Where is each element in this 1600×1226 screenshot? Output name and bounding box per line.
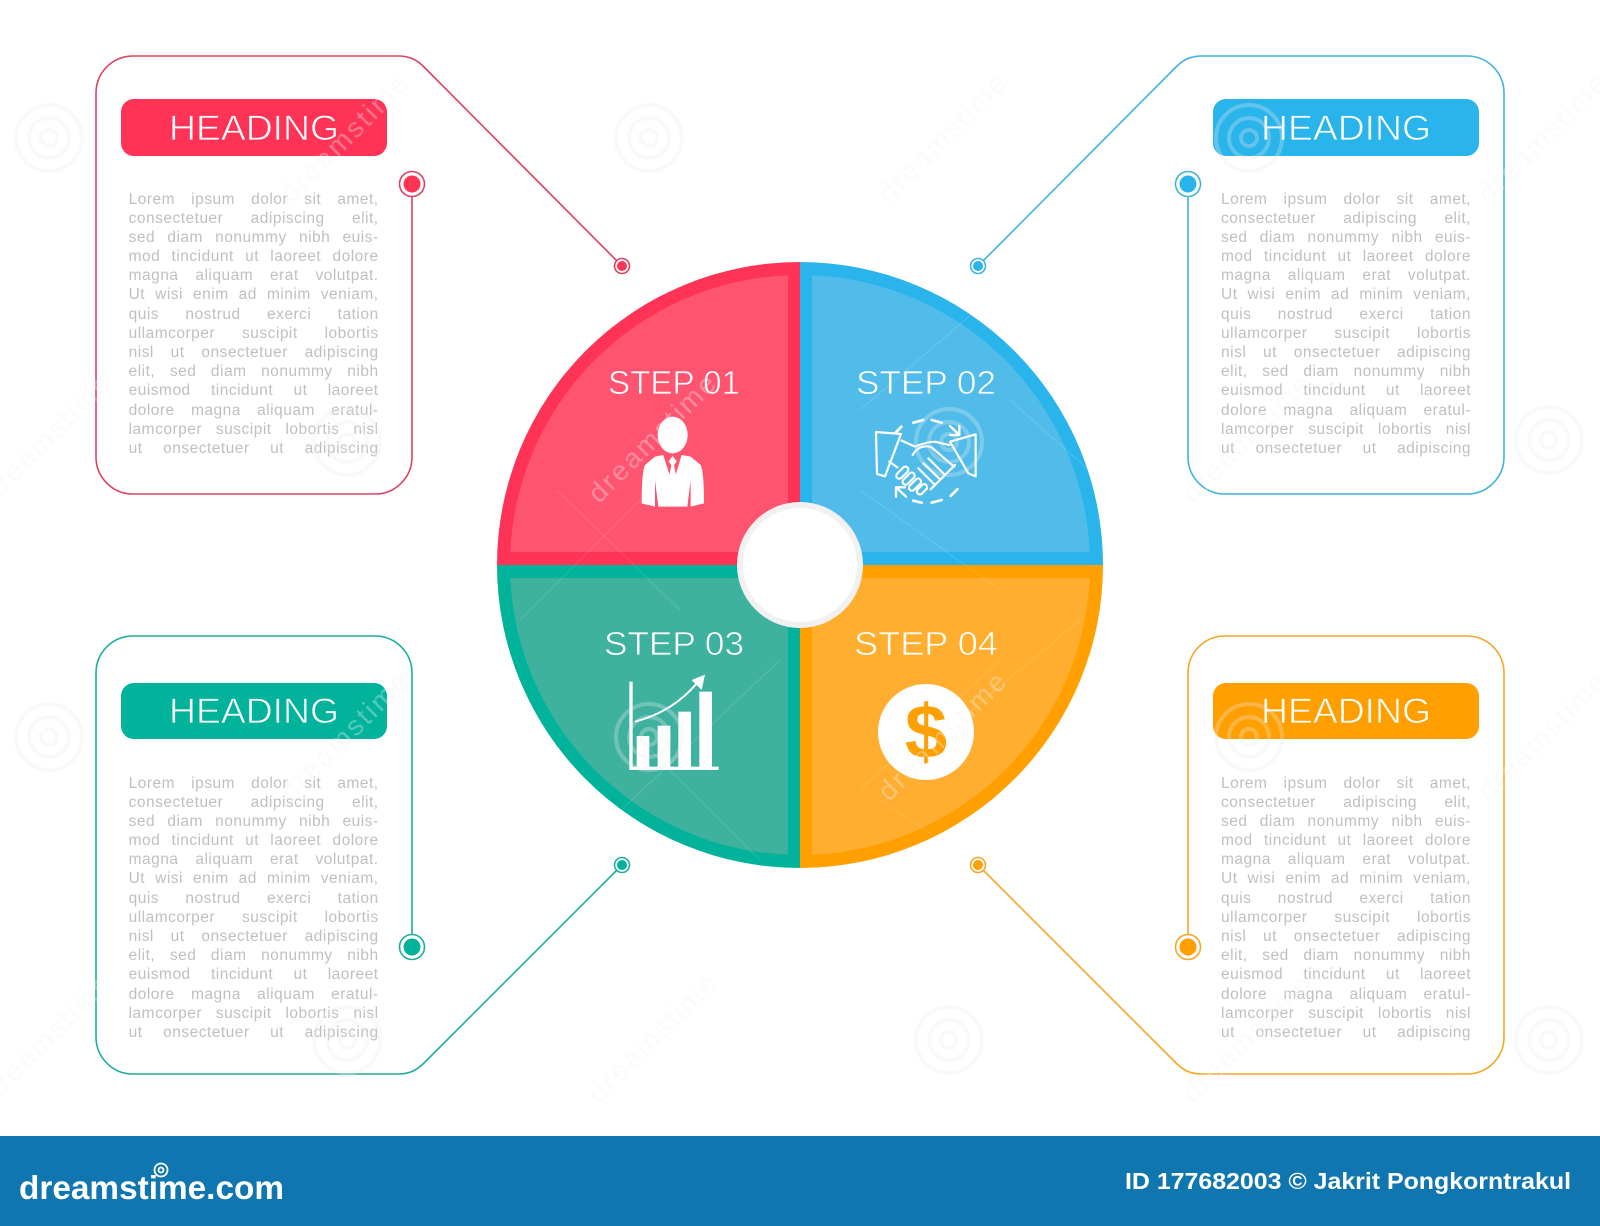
green outline and connector	[96, 636, 630, 1074]
panel: blue heading box	[970, 55, 1505, 495]
green body text: ut onsectetuer ut adipiscing	[129, 1024, 379, 1041]
panel: red heading box	[95, 55, 630, 495]
red body text: dolore magna aliquam eratul-	[129, 402, 379, 419]
red body text: ut onsectetuer ut adipiscing	[129, 440, 379, 457]
green body text: elit, sed diam nonummy nibh	[129, 947, 379, 964]
green heading bar	[121, 683, 387, 739]
orange body text: quis nostrud exerci tation	[1221, 890, 1471, 907]
orange body text: ullamcorper suscipit lobortis	[1221, 909, 1471, 926]
green body text	[129, 774, 379, 1041]
red body text: elit, sed diam nonummy nibh	[129, 363, 379, 380]
blue body text: nisl ut onsectetuer adipiscing	[1221, 344, 1471, 361]
blue body text: consectetuer adipiscing elit,	[1221, 210, 1471, 227]
segment: step 03 green	[497, 565, 800, 868]
icon: bar chart with arrow	[629, 675, 719, 770]
blue body text: Lorem ipsum dolor sit amet,	[1221, 190, 1471, 208]
green body text: quis nostrud exerci tation	[129, 890, 379, 907]
center hub	[740, 505, 860, 625]
icon: handshake	[876, 420, 976, 503]
orange heading bar: HEADING	[1261, 692, 1431, 731]
red body text: Ut wisi enim ad minim veniam,	[129, 286, 379, 303]
orange body text: ut onsectetuer ut adipiscing	[1221, 1024, 1471, 1041]
orange body text	[1221, 774, 1471, 1041]
orange body text: elit, sed diam nonummy nibh	[1221, 947, 1471, 964]
footer credit: ID 177682003 © Jakrit Pongkorntrakul	[1125, 1168, 1571, 1194]
green heading bar: HEADING	[169, 692, 339, 731]
footer logo: dreamstime.com	[19, 1169, 284, 1206]
label: step 03: STEP 03	[604, 625, 744, 662]
segment: step 04 orange	[800, 565, 1103, 868]
green body text: magna aliquam erat volutpat.	[129, 851, 379, 868]
icon: businessman	[642, 417, 704, 507]
red body text	[129, 190, 379, 457]
red body text: quis nostrud exerci tation	[129, 306, 379, 323]
blue outline and connector	[970, 56, 1504, 494]
orange heading bar	[1213, 683, 1479, 739]
blue body text: ut onsectetuer ut adipiscing	[1221, 440, 1471, 457]
blue body text: magna aliquam erat volutpat.	[1221, 267, 1471, 284]
green body text: euismod tincidunt ut laoreet	[129, 966, 379, 983]
label: step 04: STEP 04	[854, 625, 998, 662]
segment: step 02 blue	[800, 262, 1103, 565]
blue body text	[1221, 190, 1471, 457]
orange body text: dolore magna aliquam eratul-	[1221, 986, 1471, 1003]
red body text: lamcorper suscipit lobortis nisl	[129, 421, 379, 438]
green connector dots	[404, 860, 627, 956]
green body text: consectetuer adipiscing elit,	[129, 794, 379, 811]
red body text: ullamcorper suscipit lobortis	[129, 325, 379, 342]
segment: step 01 red	[497, 262, 800, 565]
red body text: sed diam nonummy nibh euis-	[129, 229, 379, 246]
orange connector dots	[973, 860, 1196, 956]
orange body text: nisl ut onsectetuer adipiscing	[1221, 928, 1471, 945]
blue body text: quis nostrud exerci tation	[1221, 306, 1471, 323]
icon: dollar coin: $	[905, 690, 947, 775]
orange body text: lamcorper suscipit lobortis nisl	[1221, 1005, 1471, 1022]
blue heading bar: HEADING	[1261, 109, 1431, 148]
red body text: nisl ut onsectetuer adipiscing	[129, 344, 379, 361]
red outline and connector	[96, 56, 630, 494]
blue body text: mod tincidunt ut laoreet dolore	[1221, 248, 1471, 265]
orange body text: Lorem ipsum dolor sit amet,	[1221, 774, 1471, 792]
blue body text: Ut wisi enim ad minim veniam,	[1221, 286, 1471, 303]
red heading bar	[121, 99, 387, 156]
red body text: consectetuer adipiscing elit,	[129, 210, 379, 227]
red connector dots	[404, 176, 627, 271]
blue body text: sed diam nonummy nibh euis-	[1221, 229, 1471, 246]
red body text: Lorem ipsum dolor sit amet,	[129, 190, 379, 208]
green body text: dolore magna aliquam eratul-	[129, 986, 379, 1003]
red body text: magna aliquam erat volutpat.	[129, 267, 379, 284]
green body text: sed diam nonummy nibh euis-	[129, 813, 379, 830]
panel: orange heading box	[970, 635, 1505, 1075]
orange body text: mod tincidunt ut laoreet dolore	[1221, 832, 1471, 849]
blue body text: ullamcorper suscipit lobortis	[1221, 325, 1471, 342]
blue connector dots	[973, 176, 1196, 271]
orange body text: magna aliquam erat volutpat.	[1221, 851, 1471, 868]
blue body text: euismod tincidunt ut laoreet	[1221, 382, 1471, 399]
green body text: Ut wisi enim ad minim veniam,	[129, 870, 379, 887]
red body text: euismod tincidunt ut laoreet	[129, 382, 379, 399]
orange body text: consectetuer adipiscing elit,	[1221, 794, 1471, 811]
panel: green heading box	[95, 635, 630, 1075]
footer bar	[0, 1136, 1600, 1226]
label: step 02: STEP 02	[856, 364, 996, 401]
orange body text: sed diam nonummy nibh euis-	[1221, 813, 1471, 830]
blue body text: lamcorper suscipit lobortis nisl	[1221, 421, 1471, 438]
label: step 01: STEP 01	[608, 364, 740, 401]
orange body text: euismod tincidunt ut laoreet	[1221, 966, 1471, 983]
orange outline and connector	[970, 636, 1504, 1074]
green body text: ullamcorper suscipit lobortis	[129, 909, 379, 926]
green body text: mod tincidunt ut laoreet dolore	[129, 832, 379, 849]
red heading bar: HEADING	[169, 109, 339, 148]
green body text: nisl ut onsectetuer adipiscing	[129, 928, 379, 945]
orange body text: Ut wisi enim ad minim veniam,	[1221, 870, 1471, 887]
red body text: mod tincidunt ut laoreet dolore	[129, 248, 379, 265]
green body text: lamcorper suscipit lobortis nisl	[129, 1005, 379, 1022]
blue body text: dolore magna aliquam eratul-	[1221, 402, 1471, 419]
icon: dollar coin	[878, 684, 974, 780]
blue heading bar	[1213, 99, 1479, 156]
green body text: Lorem ipsum dolor sit amet,	[129, 774, 379, 792]
blue body text: elit, sed diam nonummy nibh	[1221, 363, 1471, 380]
